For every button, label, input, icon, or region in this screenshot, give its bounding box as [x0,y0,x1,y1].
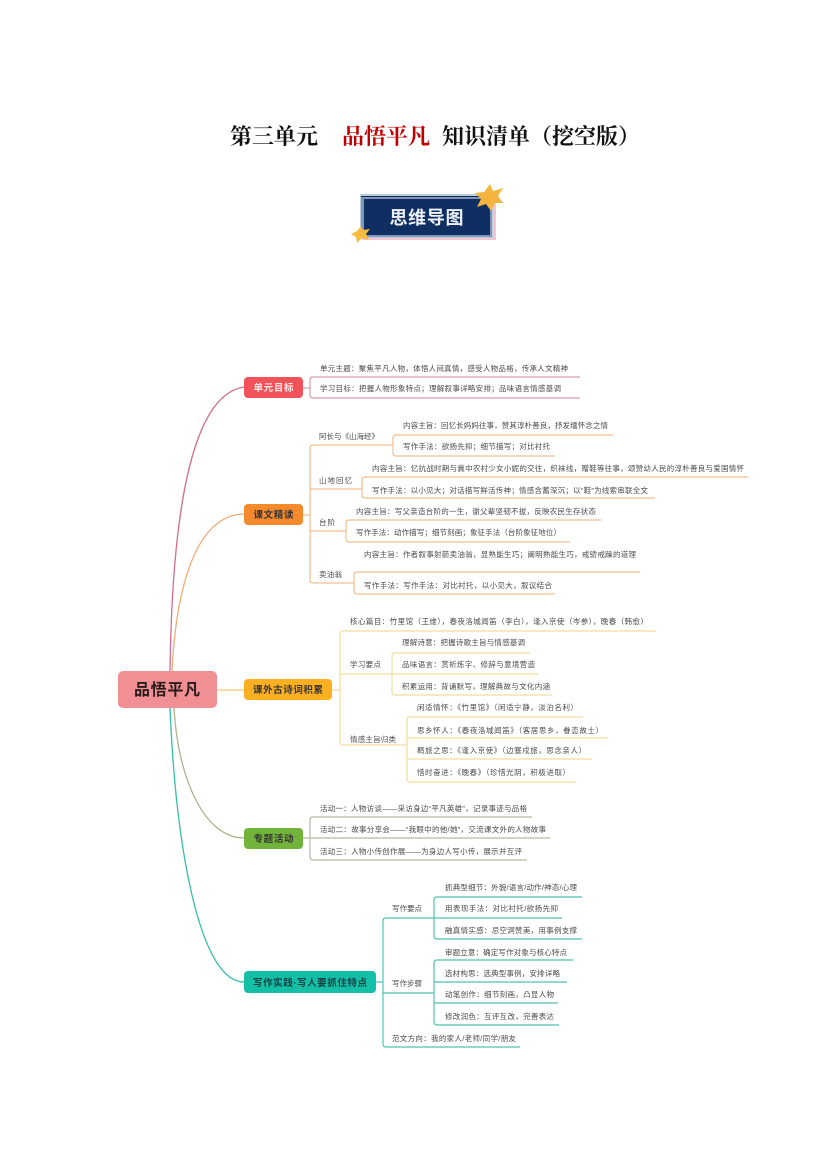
text: Ah Chang theme: 内容主旨：回忆长妈妈往事，赞其淳朴善良，抒发缅怀念之情 [403,420,608,430]
text: mountain memories: 山地回忆 [319,475,352,485]
text: learning goal: 学习目标：把握人物形象特点；理解叙事详略安排；品味语言情感基调 [320,383,561,393]
text: steps technique: 写作手法：动作描写；细节刻画；象征手法（台阶象征地位） [356,527,561,537]
text: accumulation: 积累运用：背诵默写，理解典故与文化内涵 [402,681,550,691]
text: material: 选材构思：选典型事例，安排详略 [445,968,560,978]
text: activity two: 活动二：故事分享会——“我眼中的他/她”，交流课文外的人物故事 [320,824,546,834]
text: topic: 审题立意：确定写作对象与核心特点 [445,947,568,957]
text: cherish time: 惜时奋进：《晚春》（珍惜光阴，积极进取） [417,767,570,777]
connector curves from central topic [170,387,244,982]
node: close reading [244,504,303,525]
panel: writing practice [244,882,582,1047]
text: Ah Chang technique: 写作手法：欲扬先抑；细节描写；对比衬托 [403,441,550,451]
text: oil seller theme: 内容主旨：作者叙事射箭卖油翁，显熟能生巧；阐明熟能生巧，戒骄戒躁的道理 [364,549,636,559]
text: language: 品味语言：赏析炼字、修辞与意境营造 [402,659,536,669]
panel: classical poetry [244,616,656,782]
text: Ah Chang: 阿长与《山海经》 [319,431,379,441]
badge: mind map heading: 思维导图 [390,208,464,228]
text: core poems: 核心篇目：竹里馆（王维），春夜洛城闻笛（李白），逢入京使（岑参），晚春（韩愈） [350,616,648,626]
node: themed activities [244,828,303,849]
node: writing practice: 写作实践·写人要抓住特点 [253,977,367,989]
text: travel: 羁旅之思：《逢入京使》（边塞戍旅，思念亲人） [417,745,586,755]
text: writing key points: 写作要点 [392,903,422,913]
text: emotion themes: 情感主旨归类 [350,734,396,744]
text: steps: 台阶 [319,517,336,527]
node: unit goals: 单元目标 [254,382,294,394]
text: mountain theme: 内容主旨：忆抗战时期与冀中农村少女小妮的交往，织袜线，赠鞋等往事，颂赞幼人民的淳朴善良与爱国情怀 [372,463,744,473]
text: understanding: 理解诗意：把握诗歌主旨与情感基调 [402,637,525,647]
panel: unit goals [244,363,580,398]
node: unit goals [244,377,303,398]
node: writing practice [244,971,376,993]
text: drafting: 动笔创作：细节刻画，凸显人物 [445,989,554,999]
panel: close reading [244,420,748,594]
text: mountain technique: 写作手法：以小见大；对话描写鲜活传神；情感含蓄深沉；以“鞋”为线索串联全文 [372,485,648,495]
title [230,124,640,149]
node: themed activities: 专题活动 [254,833,294,845]
badge: mind map heading [351,184,503,243]
title: 第三单元 [230,124,318,149]
text: revising: 修改润色：互评互改，完善表达 [445,1011,554,1021]
text: writing steps: 写作步骤 [392,978,422,988]
text: learning points: 学习要点 [350,659,382,669]
node: classical poetry [244,679,332,700]
title: 知识清单 [442,124,530,149]
panel: themed activities [244,803,550,860]
text: activity one: 活动一：人物访谈——采访身边“平凡英雄”，记录事迹与品格 [320,803,528,813]
central topic [118,671,217,708]
text: sample directions: 范文方向：我的家人/老师/同学/朋友 [392,1033,516,1043]
text: oil seller: 卖油翁 [319,569,342,579]
text: unit theme: 单元主题：聚焦平凡人物，体悟人间真情，感受人物品格，传承人文精神 [320,363,568,373]
node: classical poetry: 课外古诗词积累 [253,684,323,696]
text: steps theme: 内容主旨：写父亲造台阶的一生，谢父辈坚韧不拔，反映农民生存状态 [356,506,596,516]
text: true feeling: 融真情实感：忌空洞赞美，用事例支撑 [445,925,578,935]
central topic: 品悟平凡 [134,681,200,699]
node: close reading: 课文精读 [254,509,294,521]
text: techniques: 用表现手法：对比衬托/欲扬先抑 [445,903,558,913]
text: typical details: 抓典型细节：外貌/语言/动作/神态/心理 [445,882,578,892]
text: leisure: 闲适情怀：《竹里馆》（闲适宁静，淡泊名利） [417,702,578,712]
title: 品悟平凡 [342,124,430,149]
title: （挖空版） [530,124,640,149]
text: oil seller technique: 写作手法：写作手法：对比衬托，以小见大，叙议结合 [364,580,552,590]
text: homesick: 思乡怀人：《春夜洛城闻笛》（客居思乡，眷恋故土） [417,725,603,735]
text: activity three: 活动三：人物小传创作展——为身边人写小传，展示并互评 [320,846,522,856]
